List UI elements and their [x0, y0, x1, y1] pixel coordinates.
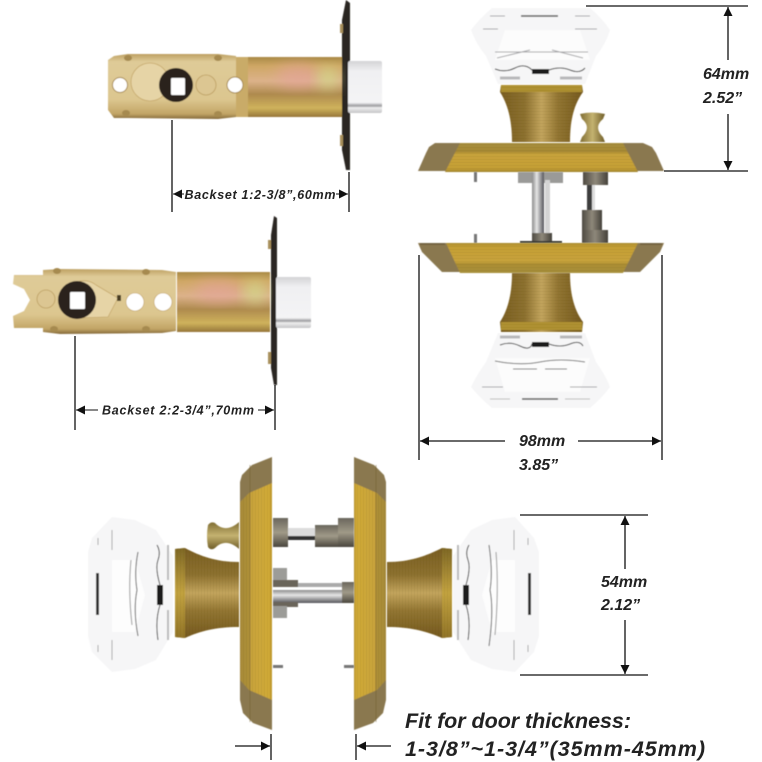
spindles — [474, 172, 608, 243]
bottom knob assembly — [88, 457, 539, 730]
small thumb turn — [580, 112, 605, 142]
latch 2 — [13, 216, 311, 385]
64mm dimension: 2.52” — [702, 90, 742, 107]
98mm dimension: 3.85” — [519, 457, 558, 474]
54mm dimension: 54mm — [601, 574, 647, 591]
brass collar bottom — [500, 273, 583, 332]
spindles — [273, 518, 354, 668]
64mm dimension: 64mm — [703, 66, 749, 83]
lower rose plate — [418, 243, 664, 273]
door thickness caption — [405, 709, 705, 761]
left glass knob — [88, 517, 173, 672]
right brass collar — [387, 548, 452, 638]
54mm dimension: 2.12” — [600, 597, 640, 614]
right rose plate — [354, 457, 386, 730]
left brass collar — [175, 548, 239, 638]
door thickness caption: 1-3/8”~1-3/4”(35mm-45mm) — [405, 737, 705, 761]
left rose plate — [240, 457, 272, 730]
top rose plate — [418, 143, 664, 172]
54mm dimension — [520, 515, 648, 675]
glass knob bottom — [471, 333, 610, 408]
backset 2 dimension: Backset 2:2-3/4”,70mm — [102, 404, 254, 418]
brass collar top — [500, 85, 583, 142]
right glass knob — [453, 517, 539, 672]
left thumb turn — [207, 522, 239, 549]
top knob assembly — [418, 8, 664, 408]
backset 1 dimension: Backset 1:2-3/8”,60mm — [184, 188, 336, 202]
64mm dimension — [586, 6, 749, 171]
glass knob top — [471, 8, 610, 84]
door thickness arrows — [235, 734, 391, 760]
door thickness caption: Fit for door thickness: — [405, 709, 631, 733]
98mm dimension: 98mm — [519, 433, 565, 450]
latch 1 — [108, 0, 382, 170]
98mm dimension — [419, 255, 662, 474]
